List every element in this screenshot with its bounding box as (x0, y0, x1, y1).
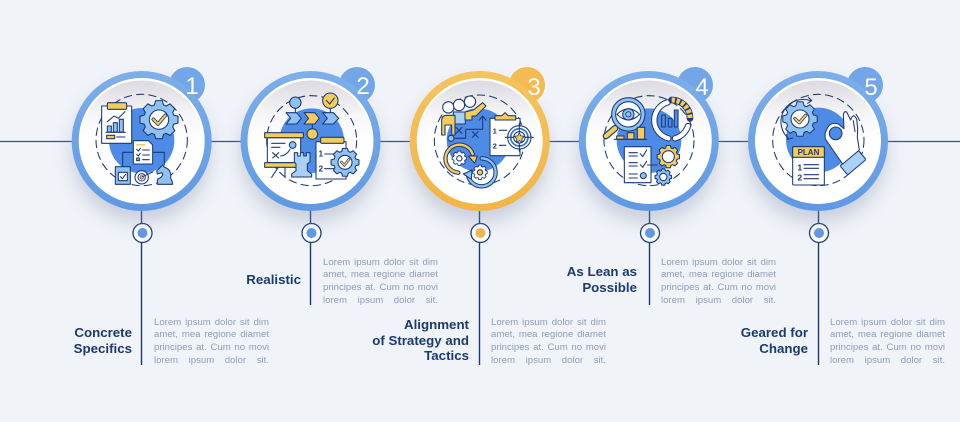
icon: gear cycle, plan sheet, OK hand: 1 (797, 163, 802, 173)
ring 4 (579, 71, 719, 211)
title: Geared for Change: Change (759, 341, 808, 356)
badge 3 (509, 67, 545, 103)
text block 2: Lorem ipsum dolor sit dim (323, 257, 438, 268)
title: Concrete Specifics (74, 325, 132, 356)
shadow 1 (71, 83, 211, 223)
ring 3 (410, 71, 550, 211)
panel: step 5 (747, 67, 888, 365)
text block 4 (661, 257, 776, 306)
text block 4: principes at. Cum no movi (661, 282, 776, 293)
shadow 3 (409, 83, 549, 223)
text block 2: lorem ipsum dolor sit. (323, 295, 438, 306)
text block 1 (154, 317, 269, 366)
shadow 2 (240, 83, 380, 223)
icon: gear cycle, plan sheet, OK hand: 2 (797, 172, 802, 182)
badge 5 (847, 67, 883, 103)
panel: step 4 (578, 67, 719, 305)
text block 1: lorem ipsum dolor sit. (154, 355, 269, 366)
text block 2 (323, 257, 438, 306)
node 1 (133, 224, 152, 242)
title: Geared for Change: Geared for (741, 325, 808, 340)
title: Alignment of Strategy and Tactics (372, 317, 469, 363)
icon: magnifier, gauge chart, checklist, gears (604, 96, 694, 186)
text block 1: amet, mea regione diamet (154, 329, 269, 340)
number 1: 1 (185, 73, 199, 100)
text block 1: principes at. Cum no movi (154, 342, 269, 353)
text block 4: lorem ipsum dolor sit. (661, 295, 776, 306)
ring 2 (240, 71, 380, 211)
node 5 (810, 224, 828, 242)
text block 3: lorem ipsum dolor sit. (491, 355, 606, 366)
panel: step 1 (71, 67, 212, 365)
connector 2 (310, 205, 312, 305)
shadow 5 (747, 83, 887, 223)
connector 3 (478, 205, 480, 365)
timeline horizontal line (0, 140, 960, 142)
text block 3: Lorem ipsum dolor sit dim (491, 317, 606, 328)
icon: team, tactics, clipboard target, cycle gears (434, 95, 533, 186)
title: As Lean as Possible (567, 264, 637, 295)
text block 5 (830, 317, 945, 366)
title: Alignment of Strategy and Tactics: of Strategy and (372, 333, 469, 348)
node 3 (471, 224, 490, 242)
text block 5: lorem ipsum dolor sit. (830, 355, 945, 366)
text block 4: amet, mea regione diamet (661, 269, 776, 280)
icon: gear cycle, plan sheet, OK hand (773, 94, 866, 186)
icon: milestones, strategy board, rook, clipboard (265, 93, 359, 186)
title: As Lean as Possible: Possible (582, 280, 637, 295)
badge 2 (339, 67, 375, 103)
text block 3: amet, mea regione diamet (491, 329, 606, 340)
node 2 (302, 224, 321, 242)
icon: team, tactics, clipboard target, cycle gears: 2 (493, 141, 497, 150)
ring 1 (72, 71, 212, 211)
shadow 4 (578, 83, 718, 223)
icon: clipboard, gear, checklist, target, knight (96, 94, 187, 186)
title: Alignment of Strategy and Tactics: Alignment (404, 317, 469, 332)
text block 3 (491, 317, 606, 366)
badge 4 (677, 67, 713, 103)
text block 1: Lorem ipsum dolor sit dim (154, 317, 269, 328)
icon: team, tactics, clipboard target, cycle gears: 1 (493, 126, 498, 135)
text block 5: Lorem ipsum dolor sit dim (830, 317, 945, 328)
text block 5: amet, mea regione diamet (830, 329, 945, 340)
number 5: 5 (864, 74, 878, 101)
panel: step 2 (240, 67, 380, 305)
panel: step 3 (409, 67, 550, 365)
number 2: 2 (356, 73, 370, 100)
title: Realistic: Realistic (246, 272, 301, 287)
badge 1 (169, 67, 205, 103)
text block 4: Lorem ipsum dolor sit dim (661, 257, 776, 268)
title: Geared for Change (741, 325, 808, 356)
connector 1 (140, 205, 142, 365)
title: Alignment of Strategy and Tactics: Tactics (424, 348, 469, 363)
number 3: 3 (527, 74, 541, 101)
node 4 (640, 224, 660, 242)
text block 3: principes at. Cum no movi (491, 342, 606, 353)
text block 5: principes at. Cum no movi (830, 342, 945, 353)
number 4: 4 (695, 74, 709, 101)
title: Concrete Specifics: Specifics (74, 341, 132, 356)
title: As Lean as Possible: As Lean as (567, 264, 637, 279)
icon: gear cycle, plan sheet, OK hand: PLAN (798, 148, 820, 157)
ring 5 (748, 71, 888, 211)
text block 2: amet, mea regione diamet (323, 269, 438, 280)
connector 4 (648, 205, 650, 305)
text block 2: principes at. Cum no movi (323, 282, 438, 293)
icon: milestones, strategy board, rook, clipboard: 1 (319, 150, 324, 159)
connector 5 (818, 205, 820, 365)
title: Concrete Specifics: Concrete (74, 325, 132, 340)
icon: milestones, strategy board, rook, clipboard: 2 (319, 165, 324, 174)
